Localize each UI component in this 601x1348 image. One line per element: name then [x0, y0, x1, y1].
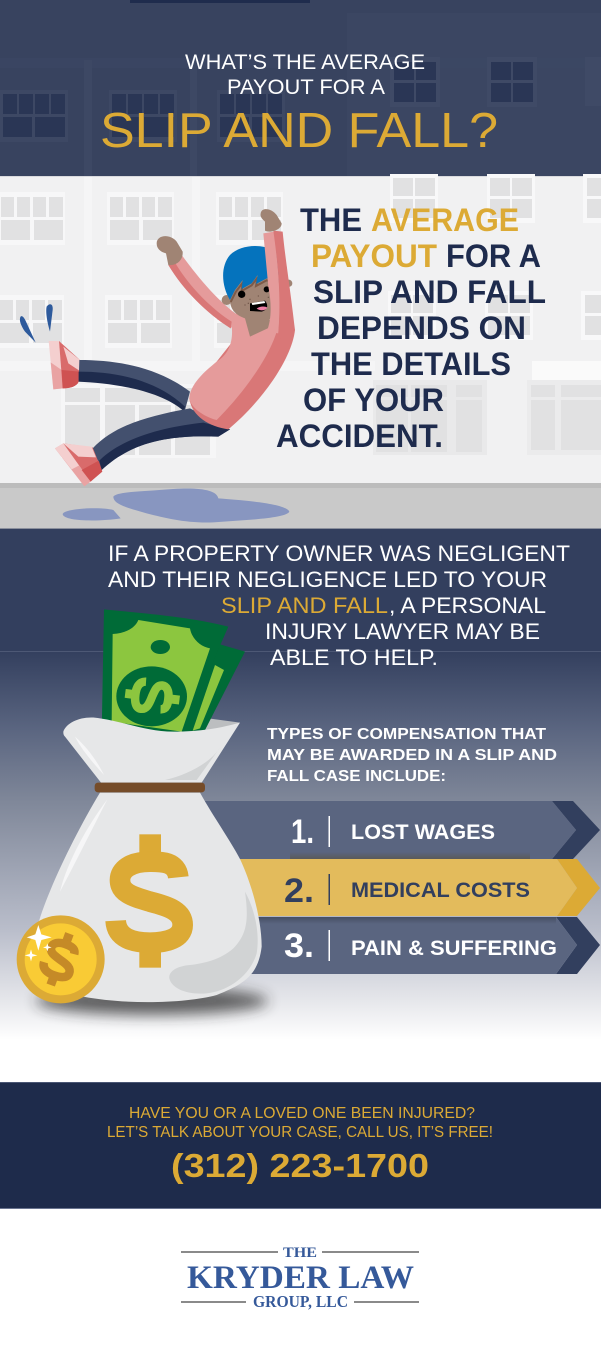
headline: THE DETAILS [311, 346, 511, 382]
icon: money bag with cash and coin [17, 609, 268, 1015]
logo: The Kryder Law Group [181, 1245, 419, 1311]
ribbon 1: lost wages: LOST WAGES [351, 821, 495, 844]
call to action band: (312) 223-1700 [171, 1147, 429, 1184]
call to action band: LET’S TALK ABOUT YOUR CASE, CALL US, IT’S FREE! [107, 1124, 493, 1141]
title: WHAT’S THE AVERAGE [185, 51, 425, 74]
panel: header background with building [0, 0, 601, 177]
headline: ACCIDENT. [276, 418, 443, 454]
compensation intro text [267, 726, 557, 785]
illustration: puddle [63, 489, 289, 522]
torso [189, 290, 295, 429]
logo: The Kryder Law Group: KRYDER LAW [187, 1260, 414, 1296]
icon: water drops [20, 304, 53, 343]
ribbon 1: lost wages: 1. [291, 813, 314, 851]
headline [276, 202, 546, 454]
icon: dollar sign [116, 834, 183, 968]
intro paragraph: SLIP AND FALL [221, 593, 388, 618]
illustration: falling person [20, 209, 295, 486]
logo: The Kryder Law Group: GROUP, LLC [253, 1292, 348, 1311]
intro paragraph: AND THEIR NEGLIGENCE LED TO YOUR [108, 567, 547, 592]
ribbon 3: pain and suffering: PAIN & SUFFERING [351, 937, 557, 960]
panel: street scene background [0, 174, 601, 528]
headline: DEPENDS ON [317, 310, 526, 346]
ribbon 3: pain and suffering: 3. [284, 927, 314, 965]
compensation intro text: FALL CASE INCLUDE: [267, 768, 446, 785]
front bill [102, 609, 228, 733]
left hand [157, 236, 183, 265]
upper leg [79, 360, 190, 411]
call to action band [0, 1082, 601, 1209]
bag neck [63, 717, 240, 783]
raised arm [263, 231, 295, 340]
bag strap [95, 783, 205, 792]
headline: AVERAGE [371, 202, 519, 238]
bag body [37, 793, 262, 1002]
intro paragraph: ABLE TO HELP. [270, 645, 438, 670]
title: SLIP AND FALL? [100, 104, 498, 158]
ribbon 3: pain and suffering [240, 917, 600, 974]
ribbon 1: lost wages [205, 801, 600, 859]
ribbon 2: medical costs: 2. [284, 872, 314, 910]
lower leg [93, 408, 230, 470]
bag back lip [200, 718, 240, 735]
coin [17, 915, 105, 1003]
ribbon 2: medical costs [230, 859, 600, 916]
intro paragraph: , A PERSONAL [389, 593, 546, 618]
left arm [168, 255, 240, 328]
headline: SLIP AND FALL [313, 274, 546, 310]
compensation intro text: MAY BE AWARDED IN A SLIP AND [267, 747, 557, 764]
title: PAYOUT FOR A [227, 76, 385, 99]
bag shadow [36, 987, 268, 1015]
call to action band: HAVE YOU OR A LOVED ONE BEEN INJURED? [129, 1105, 475, 1122]
headline: OF YOUR [303, 382, 444, 418]
intro paragraph [108, 541, 570, 670]
intro paragraph: IF A PROPERTY OWNER WAS NEGLIGENT [108, 541, 570, 566]
headline: THE [300, 202, 362, 238]
title [100, 51, 498, 158]
back bill [180, 643, 245, 733]
logo: The Kryder Law Group: THE [283, 1245, 317, 1261]
lower shoe [55, 443, 102, 486]
head [222, 246, 292, 337]
intro paragraph: INJURY LAWYER MAY BE [265, 619, 540, 644]
panel: lower gradient background [0, 528, 601, 1040]
headline: FOR A [446, 238, 541, 274]
upper shoe [49, 341, 80, 389]
headline: PAYOUT [311, 238, 437, 274]
raised hand [261, 209, 282, 232]
compensation intro text: TYPES OF COMPENSATION THAT [267, 726, 546, 743]
ribbon 2: medical costs: MEDICAL COSTS [351, 879, 530, 902]
